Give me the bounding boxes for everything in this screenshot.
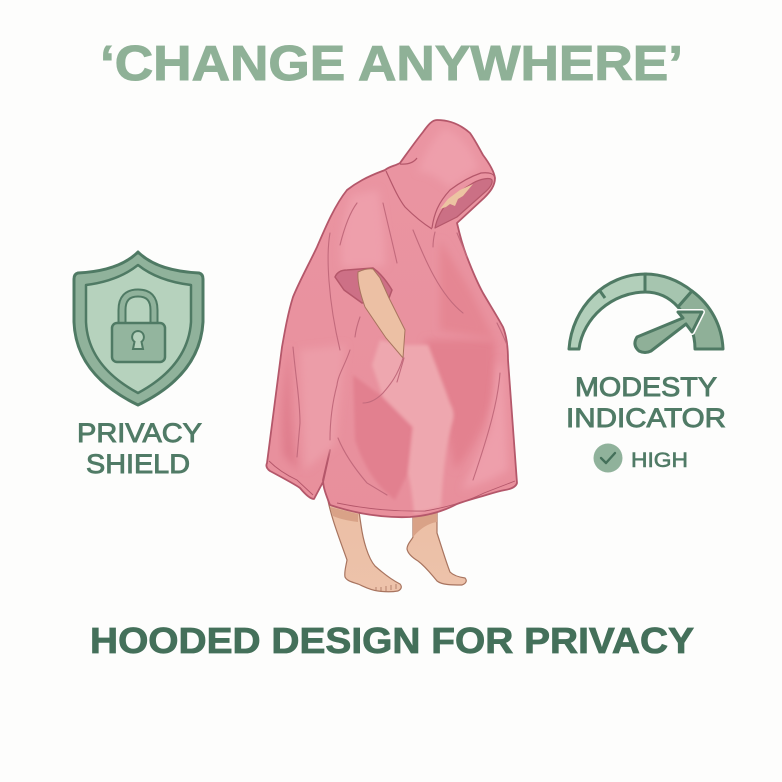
high status badge: [594, 444, 688, 472]
chest highlight: [343, 194, 383, 266]
shield inner: [86, 265, 191, 393]
modesty indicator label: MODESTY: [575, 372, 717, 402]
modesty indicator label: [566, 372, 726, 433]
arm: [358, 269, 405, 358]
modesty indicator label: INDICATOR: [566, 403, 726, 433]
face glimpse: [440, 184, 473, 209]
padlock body: [112, 323, 165, 362]
hem stitching: [269, 461, 515, 511]
fold lines: [293, 203, 507, 495]
left panel highlight: [302, 348, 342, 464]
check icon: [594, 444, 622, 472]
gauge arc high segment: [678, 291, 723, 349]
poncho body: [266, 120, 517, 517]
transparent leg silhouette: [372, 340, 454, 514]
illustration: person in hooded towel poncho: [266, 120, 517, 592]
gauge divider: [600, 291, 605, 298]
hood opening rim: [432, 173, 495, 228]
hood seam: [386, 158, 432, 229]
padlock shackle: [122, 293, 154, 324]
shield outer: [74, 252, 203, 405]
gauge arc upper right segment: [645, 274, 692, 307]
thigh shadow: [353, 375, 413, 500]
needle: [635, 312, 702, 352]
privacy shield icon: [74, 252, 203, 405]
left leg hem shadow: [330, 507, 358, 522]
privacy shield label: PRIVACY: [77, 418, 202, 448]
bottom caption: HOODED DESIGN FOR PRIVACY: [90, 620, 694, 661]
title: ‘CHANGE ANYWHERE’: [100, 37, 683, 91]
right edge highlight: [466, 370, 508, 486]
lower right shadow: [425, 340, 495, 470]
toe marks: [376, 584, 396, 592]
sleeve opening: [335, 268, 392, 303]
right leg hem shadow: [413, 512, 437, 537]
privacy shield label: SHIELD: [86, 449, 190, 479]
left leg and foot: [327, 495, 401, 592]
hood highlight: [424, 133, 473, 182]
modesty gauge icon: [569, 274, 723, 352]
poncho shading: [282, 128, 508, 514]
right upper body shadow: [441, 252, 489, 335]
high label: HIGH: [631, 449, 688, 472]
privacy shield label: [77, 418, 202, 479]
keyhole: [132, 331, 144, 349]
left fold shadow: [282, 374, 296, 464]
gauge arc left segment: [569, 274, 646, 349]
hood opening: [435, 179, 492, 228]
right leg and foot: [407, 505, 466, 585]
